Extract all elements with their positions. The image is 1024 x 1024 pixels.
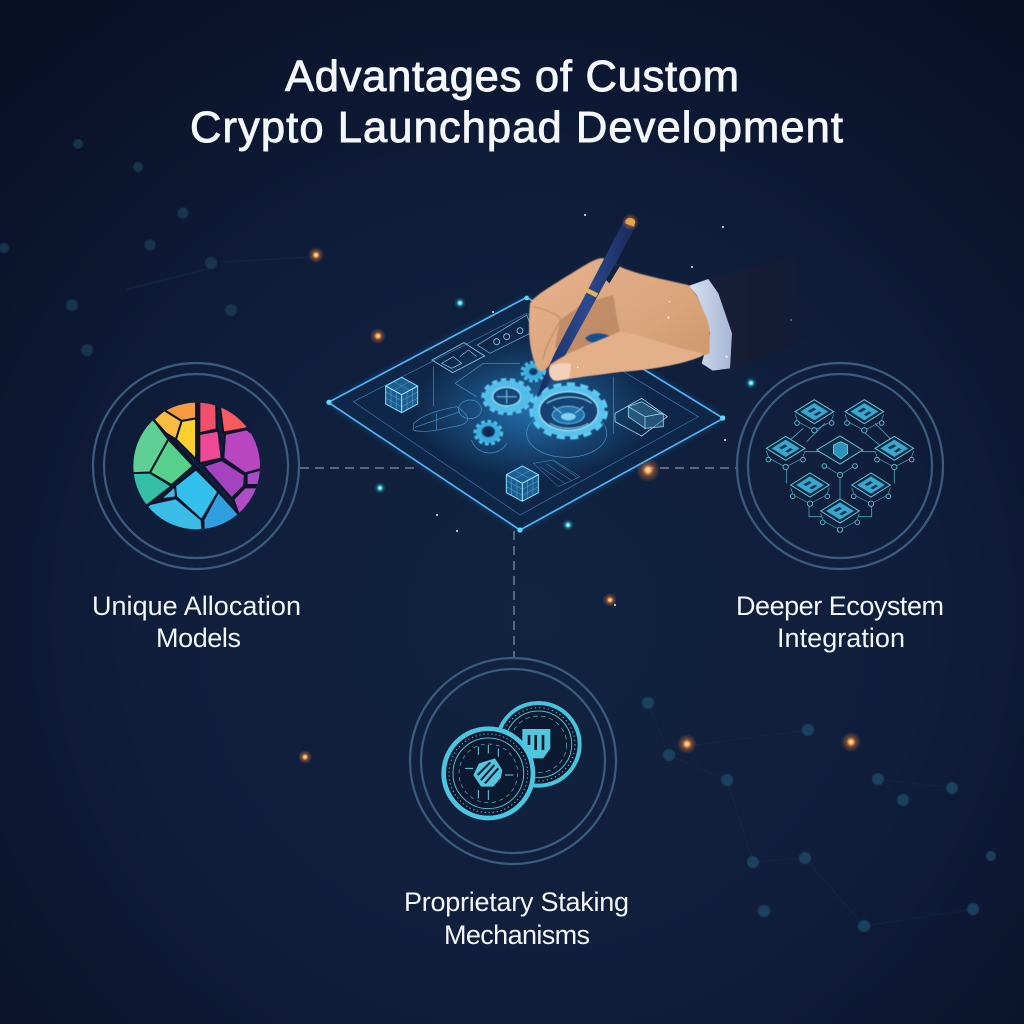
rings left — [93, 363, 299, 569]
title: Crypto Launchpad Development — [190, 104, 843, 152]
blueprint glow — [328, 297, 723, 530]
glowing particles — [298, 214, 861, 764]
blueprint plate — [326, 296, 725, 533]
isometric cube left — [386, 377, 418, 413]
gear middle — [483, 380, 531, 413]
gear bottom small — [475, 421, 502, 444]
sparkles on hand — [577, 301, 728, 368]
gear main — [532, 385, 605, 437]
back coin — [497, 703, 580, 786]
faint network: upper left — [0, 139, 310, 356]
schematic panels — [432, 315, 533, 373]
label: proprietary staking mechanisms — [404, 887, 629, 950]
isometric cube bottom — [506, 466, 538, 501]
label: deeper ecosystem integration — [736, 591, 944, 653]
hand: jacket sleeve — [708, 250, 820, 372]
faint network: lower right — [642, 697, 996, 932]
pen — [537, 213, 639, 397]
label: unique allocation models: Unique Allocation — [92, 591, 301, 621]
gear top small — [522, 362, 545, 381]
icon: colour mosaic pie — [133, 402, 260, 530]
gears cluster — [475, 362, 605, 444]
front coin — [444, 729, 533, 818]
rings bottom — [410, 658, 616, 864]
hand: palm and fingers — [529, 258, 710, 381]
panel: proprietary staking mechanisms — [404, 658, 629, 950]
isometric box right — [615, 398, 667, 436]
title — [190, 53, 843, 152]
panel: unique allocation models — [92, 363, 301, 653]
label: deeper ecosystem integration: Deeper Ecoystem — [736, 591, 944, 621]
hand: thumb — [549, 332, 703, 381]
rings right — [737, 363, 943, 569]
label: proprietary staking mechanisms: Proprietary Staking — [404, 887, 629, 917]
label: proprietary staking mechanisms: Mechanisms — [444, 920, 590, 950]
label: unique allocation models — [92, 591, 301, 653]
wireframe lines — [413, 363, 613, 487]
panel: deeper ecosystem integration — [736, 363, 944, 653]
label: unique allocation models: Models — [156, 623, 241, 653]
central blueprint and hand illustration — [326, 213, 820, 533]
icon: chip network — [766, 400, 914, 532]
title: Advantages of Custom — [285, 53, 739, 101]
dashed connectors — [300, 468, 738, 658]
label: deeper ecosystem integration: Integration — [777, 623, 905, 653]
hand: shirt cuff — [688, 279, 732, 371]
icon: staking coins — [444, 703, 580, 818]
